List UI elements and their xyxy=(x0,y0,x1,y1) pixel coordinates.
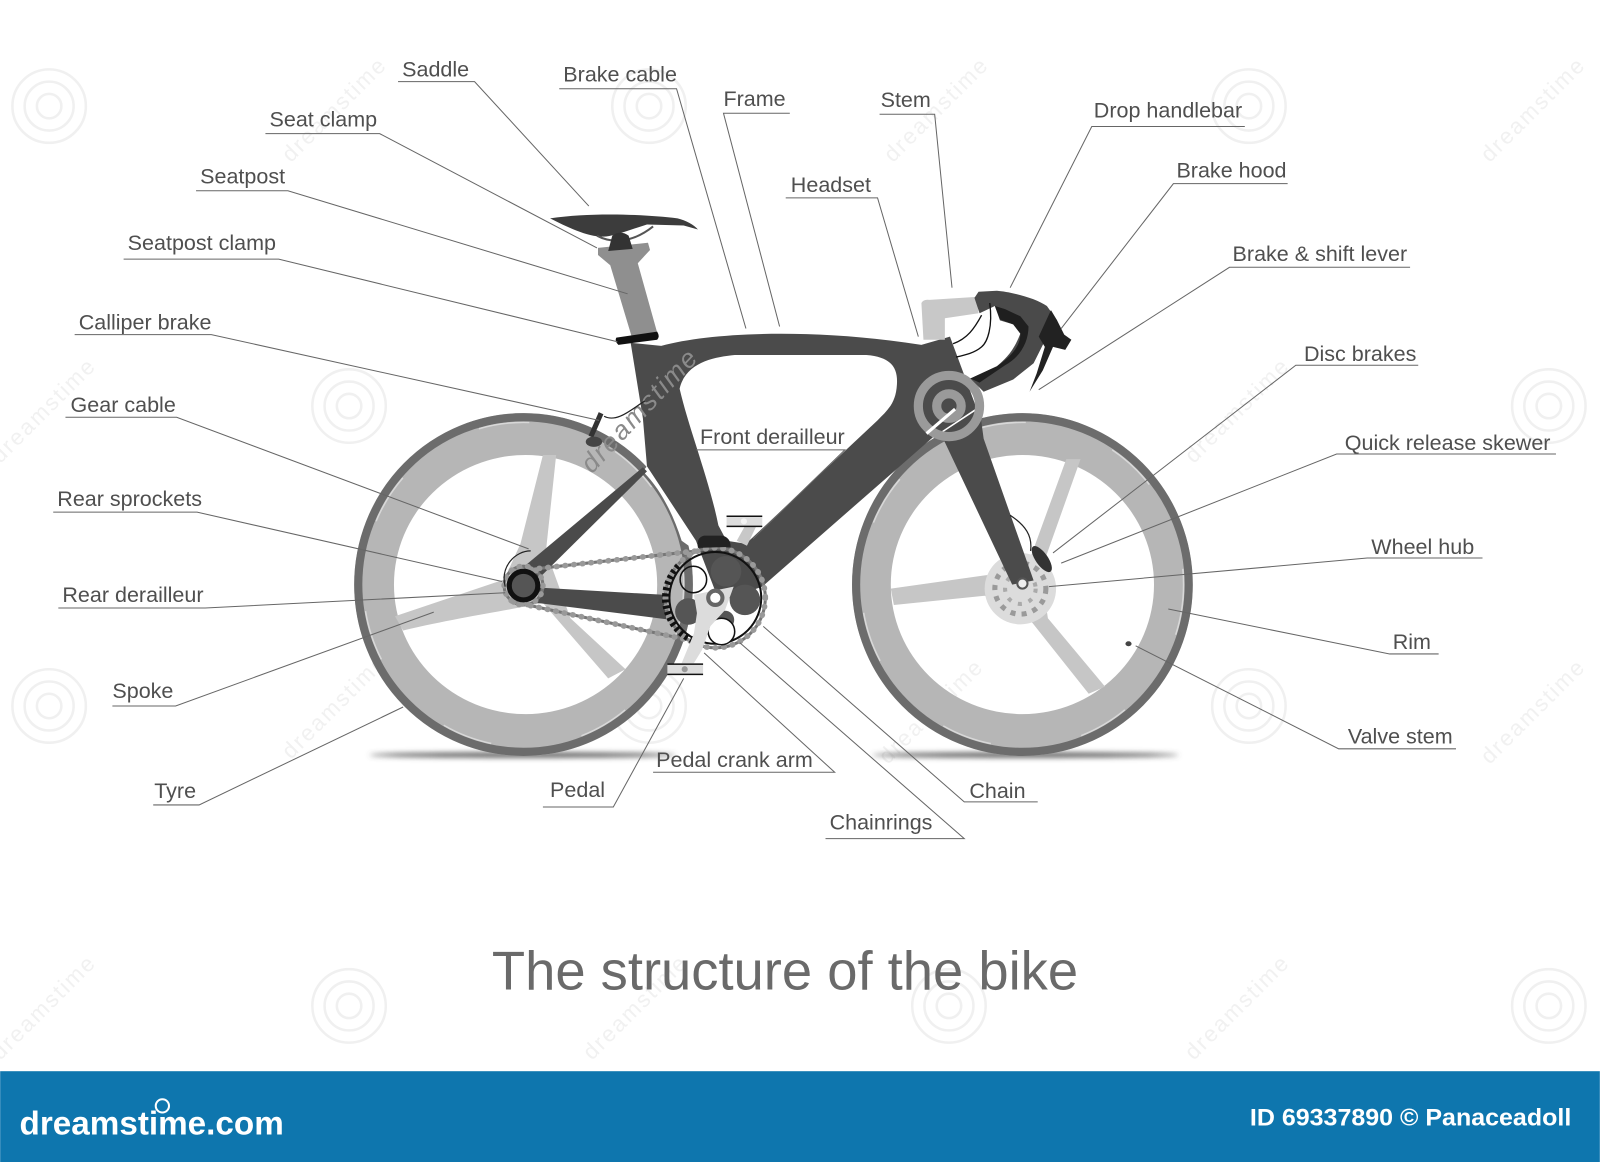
label: Frame xyxy=(723,87,790,326)
label: Tyre xyxy=(153,707,403,805)
crank spindle xyxy=(708,591,722,605)
crank arm xyxy=(682,587,734,663)
saddle xyxy=(550,214,698,237)
stem and bar top xyxy=(921,297,979,340)
chain xyxy=(504,548,765,648)
frame watermark: dreamstime xyxy=(574,342,705,478)
watermark pattern: dreamstime xyxy=(1180,353,1295,468)
label: Rear sprockets xyxy=(53,487,502,582)
ground shadows xyxy=(369,752,1178,757)
label: Chain: Chain xyxy=(969,779,1026,803)
label: Drop handlebar xyxy=(1010,98,1245,288)
label: Rim xyxy=(1168,609,1439,654)
label: Seatpost clamp xyxy=(124,231,617,342)
label: Pedal crank arm xyxy=(653,653,835,772)
label: Gear cable: Gear cable xyxy=(71,393,176,417)
label: Frame: Frame xyxy=(723,87,786,111)
brake and shift lever xyxy=(1030,310,1071,392)
rear wheel xyxy=(354,413,693,756)
front spokes xyxy=(891,459,1105,694)
lower pedal xyxy=(667,664,703,674)
drop bar and hood xyxy=(970,291,1057,392)
label: Chainrings: Chainrings xyxy=(830,810,932,834)
quick release lever xyxy=(1028,543,1056,575)
watermark pattern: dreamstime xyxy=(277,649,392,764)
label: Valve stem xyxy=(1136,646,1456,749)
label: Brake hood xyxy=(1061,159,1288,329)
rear spokes xyxy=(395,455,626,678)
label: Disc brakes xyxy=(1053,342,1418,553)
front wheel xyxy=(852,413,1193,756)
label: Stem: Stem xyxy=(881,88,931,112)
watermark pattern: dreamstime xyxy=(879,52,994,167)
fork xyxy=(941,408,1034,585)
label: Front derailleur: Front derailleur xyxy=(700,425,845,449)
watermark pattern: dreamstime xyxy=(1476,654,1590,769)
upper pedal xyxy=(727,516,762,526)
front derailleur xyxy=(698,536,731,548)
label: Disc brakes: Disc brakes xyxy=(1304,342,1416,366)
dreamstime logo: dreamstime.com xyxy=(20,1105,284,1142)
calliper brake xyxy=(586,401,645,447)
label: Rear derailleur: Rear derailleur xyxy=(62,583,204,607)
label: Brake & shift lever: Brake & shift lever xyxy=(1233,242,1407,266)
rear sprockets xyxy=(509,571,538,600)
seatpost xyxy=(598,243,657,337)
label: Stem xyxy=(880,88,952,288)
seatpost clamp xyxy=(616,332,659,345)
label: Seatpost: Seatpost xyxy=(200,165,285,189)
label: Gear cable xyxy=(65,393,529,549)
watermark pattern: dreamstime xyxy=(1476,52,1590,167)
label: Rim: Rim xyxy=(1393,630,1431,654)
label: Pedal crank arm: Pedal crank arm xyxy=(656,748,813,772)
label: Drop handlebar: Drop handlebar xyxy=(1094,98,1242,122)
label: Spoke xyxy=(112,612,434,706)
label: Headset: Headset xyxy=(791,173,871,197)
front hub xyxy=(1017,578,1028,589)
main frame triangle xyxy=(631,334,976,602)
label: Seat clamp xyxy=(265,108,597,248)
label: Tyre: Tyre xyxy=(154,779,196,803)
label: Brake cable xyxy=(559,63,746,329)
label: Calliper brake: Calliper brake xyxy=(79,311,211,335)
label: Pedal: Pedal xyxy=(550,778,605,802)
watermark pattern: dreamstime xyxy=(277,52,392,167)
brake cable to fork xyxy=(1010,515,1031,551)
label: Spoke: Spoke xyxy=(112,679,173,703)
seat clamp xyxy=(608,233,633,251)
bicycle illustration xyxy=(354,214,1193,757)
footer banner xyxy=(0,1071,1600,1162)
watermark pattern: dreamstime xyxy=(874,654,989,769)
seat stay xyxy=(518,467,647,577)
label: Quick release skewer: Quick release skewer xyxy=(1345,431,1550,455)
chainstay xyxy=(537,588,666,619)
label: Brake & shift lever xyxy=(1039,242,1410,390)
fork gap xyxy=(927,409,955,434)
label: Seatpost xyxy=(196,165,628,294)
saddle rails xyxy=(597,226,653,241)
label: Wheel hub xyxy=(1049,535,1483,587)
frame xyxy=(518,334,1034,619)
label: Front derailleur xyxy=(696,425,845,539)
white gap behind seat tube xyxy=(643,466,696,551)
label: Headset xyxy=(786,173,918,337)
label: Chainrings xyxy=(740,643,964,839)
watermark pattern: dreamstime xyxy=(1180,950,1295,1065)
headset watermark spiral xyxy=(918,375,980,437)
label: Quick release skewer xyxy=(1061,431,1556,563)
label: Seatpost clamp: Seatpost clamp xyxy=(128,231,276,255)
front derailleur tube xyxy=(737,522,757,546)
chainrings xyxy=(666,552,761,645)
label: Seat clamp: Seat clamp xyxy=(269,108,377,132)
watermark pattern: dreamstime xyxy=(578,950,693,1065)
label: Brake cable: Brake cable xyxy=(563,63,677,87)
disc brake xyxy=(985,553,1056,624)
valve stem xyxy=(1125,641,1132,646)
label: Saddle: Saddle xyxy=(402,58,469,82)
brake cables xyxy=(953,303,991,357)
image ID and author: ID 69337890 © Panaceadoll xyxy=(1250,1104,1571,1131)
label: Saddle xyxy=(398,58,589,206)
label: Chain xyxy=(763,626,1038,803)
label: Valve stem: Valve stem xyxy=(1348,725,1453,749)
rear derailleur cable xyxy=(504,551,531,587)
inner bar band xyxy=(970,306,1029,383)
label: Wheel hub: Wheel hub xyxy=(1371,535,1474,559)
label: Pedal xyxy=(543,678,684,807)
label: Rear sprockets: Rear sprockets xyxy=(57,487,202,511)
label: Rear derailleur xyxy=(58,583,505,608)
label: Calliper brake xyxy=(75,311,599,420)
title: The structure of the bike xyxy=(492,941,1078,1002)
label: Brake hood: Brake hood xyxy=(1176,159,1287,183)
